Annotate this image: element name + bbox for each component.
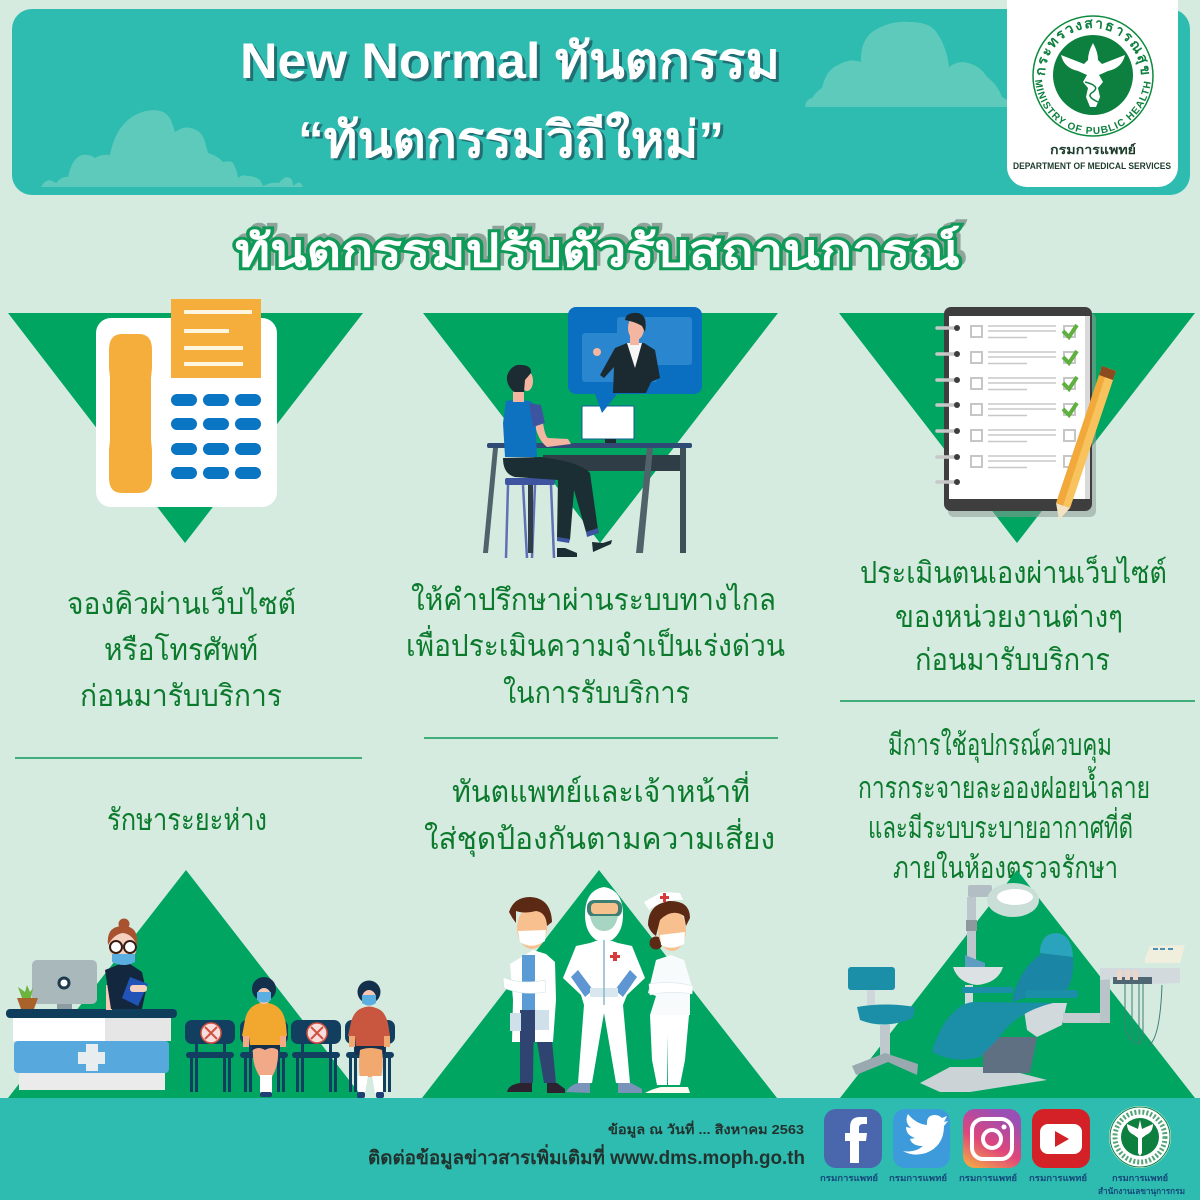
title line 2: “ทันตกรรมวิถีใหม่”	[301, 113, 727, 170]
text: booking: ก่อนมารับบริการ	[80, 680, 282, 713]
header banner	[12, 9, 1190, 195]
social labels: สำนักงานเลขานุการกรม	[1098, 1186, 1185, 1197]
text: self assessment: ประเมินตนเองผ่านเว็บไซต์	[860, 554, 1167, 590]
illustration: person at desk	[483, 365, 692, 558]
illustration: masked receptionist	[105, 918, 148, 1010]
text: booking: หรือโทรศัพท์	[104, 632, 258, 667]
illustration: nurse	[644, 892, 693, 1093]
icon: pencil	[1056, 366, 1116, 520]
icon: ministry seal: กระทรวงสาธารณสุข	[1037, 19, 1150, 76]
icon: telephone	[96, 299, 277, 507]
illustration: dental lamp and sink	[953, 883, 1039, 1007]
illustration: doctor	[503, 897, 565, 1093]
icon: small seal	[1109, 1106, 1171, 1168]
illustration: dental chair	[920, 933, 1110, 1092]
text: remote consultation: ให้คำปรึกษาผ่านระบบทางไกล	[411, 582, 776, 617]
logo caption: กรมการแพทย์	[1050, 143, 1136, 157]
panel: teleconsultation	[406, 307, 785, 710]
triangle	[423, 313, 778, 543]
icon: instagram	[963, 1109, 1021, 1168]
text: dentists wear PPE: ทันตแพทย์และเจ้าหน้าที่	[452, 771, 750, 809]
panel: self assessment	[839, 307, 1195, 677]
text: self assessment: ก่อนมารับบริการ	[915, 644, 1110, 677]
logo caption: DEPARTMENT OF MEDICAL SERVICES	[1013, 161, 1171, 171]
footer date text: ข้อมูล ณ วันที่ ... สิงหาคม 2563	[608, 1120, 804, 1138]
icon: video call screen	[568, 307, 702, 394]
text: keep distance: รักษาระยะห่าง	[107, 804, 267, 837]
footer bar	[0, 1098, 1200, 1200]
triangle	[8, 870, 363, 1098]
icon: facebook	[824, 1109, 882, 1168]
text: self assessment: ของหน่วยงานต่างๆ	[895, 601, 1123, 634]
icon: ministry seal: MINISTRY OF PUBLIC HEALTH	[1035, 80, 1151, 134]
text: airflow and aerosol control: ภายในห้องตรวจรักษา	[893, 851, 1118, 885]
title line 1: New Normal ทันตกรรม	[240, 33, 780, 89]
illustration: waiting patient one	[242, 977, 287, 1097]
illustration: instrument tray	[1100, 945, 1185, 1046]
text: airflow and aerosol control	[858, 728, 1150, 885]
text: booking: จองคิวผ่านเว็บไซต์	[67, 585, 296, 621]
logo caption	[1013, 143, 1171, 171]
triangle	[422, 870, 777, 1098]
icon: twitter	[893, 1109, 950, 1168]
icon: right cloud	[805, 22, 1007, 107]
text: remote consultation: ในการรับบริการ	[503, 676, 690, 710]
social labels: กรมการแพทย์	[1112, 1173, 1168, 1183]
triangle	[8, 313, 363, 543]
section heading: ทันตกรรมปรับตัวรับสถานการณ์	[235, 225, 960, 276]
title line 2: “ทันตกรรมวิถีใหม่”	[298, 111, 724, 168]
icon: ministry seal	[1032, 15, 1154, 137]
panel: PPE staff	[422, 771, 777, 1098]
social labels: กรมการแพทย์	[959, 1173, 1017, 1183]
text: remote consultation	[406, 582, 785, 710]
illustration: distanced chairs	[185, 1020, 395, 1092]
text: booking	[67, 585, 296, 713]
illustration: reception desk	[6, 960, 177, 1090]
triangle	[839, 313, 1195, 543]
panel: dental room	[840, 728, 1195, 1098]
text: airflow and aerosol control: มีการใช้อุปกรณ์ควบคุม	[888, 728, 1112, 764]
text: remote consultation: เพื่อประเมินความจำเป็นเร่งด่วน	[406, 625, 785, 663]
section heading: ทันตกรรมปรับตัวรับสถานการณ์	[239, 221, 964, 272]
text: dentists wear PPE	[424, 771, 775, 858]
illustration: dental stool	[848, 967, 918, 1075]
title line 1: New Normal ทันตกรรม	[243, 36, 783, 92]
panel: social distancing	[6, 804, 395, 1098]
text: dentists wear PPE: ใส่ชุดป้องกันตามความเสี่ยง	[424, 818, 775, 858]
social labels	[820, 1173, 1185, 1197]
icon: left cloud	[41, 110, 303, 187]
triangle	[840, 870, 1195, 1098]
text: self assessment	[860, 554, 1167, 677]
panel: phone booking	[8, 299, 363, 713]
icon: youtube	[1032, 1109, 1090, 1168]
footer contact text: ติดต่อข้อมูลข่าวสารเพิ่มเติมที่ www.dms.moph.go.th	[368, 1144, 805, 1170]
icon: checklist notebook	[937, 307, 1116, 520]
social labels: กรมการแพทย์	[1029, 1173, 1087, 1183]
illustration: waiting patient two	[348, 980, 390, 1098]
social labels: กรมการแพทย์	[889, 1173, 947, 1183]
illustration: PPE suit worker	[563, 887, 645, 1093]
social labels: กรมการแพทย์	[820, 1173, 878, 1183]
logo card	[1007, 0, 1178, 187]
